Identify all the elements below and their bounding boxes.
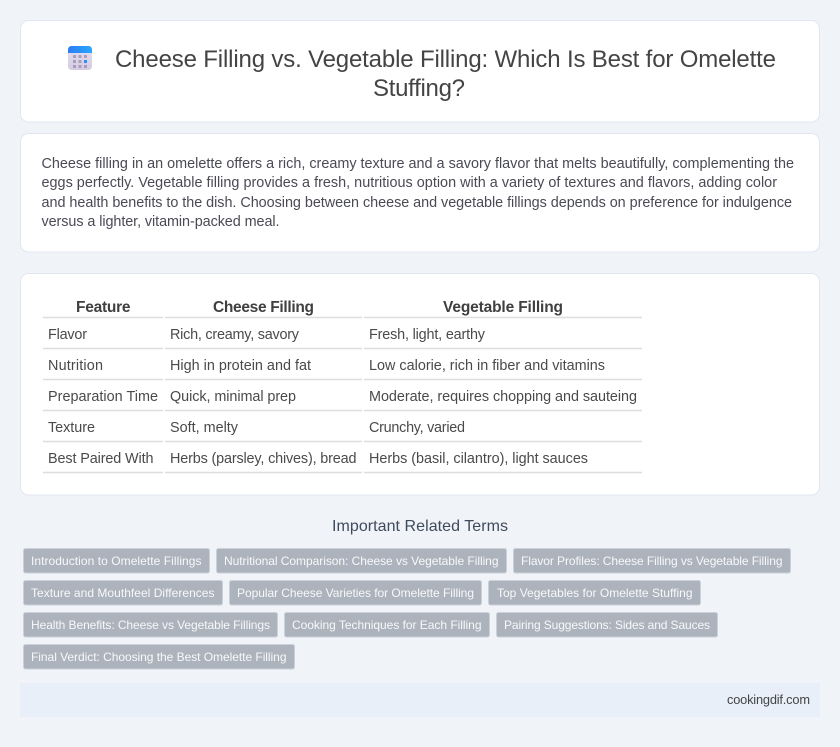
icon: calendar bbox=[68, 46, 92, 70]
title: Cheese Filling vs. Vegetable Filling: Which Is Best for Omelette bbox=[115, 46, 776, 73]
tag bbox=[24, 644, 294, 669]
table row: best paired with: Herbs (parsley, chives), bread bbox=[170, 451, 356, 467]
footer: cookingdif.com bbox=[727, 692, 810, 707]
table header row: Feature bbox=[76, 299, 131, 316]
tag bbox=[496, 612, 718, 637]
panel: summary text: Cheese filling in an omelette offers a rich, creamy texture and a savory flavor that melts beautifully, complementing the bbox=[42, 156, 794, 172]
table row: nutrition: Low calorie, rich in fiber and vitamins bbox=[369, 358, 605, 374]
table row: preparation time: Preparation Time bbox=[48, 389, 158, 405]
table row: flavor: Fresh, light, earthy bbox=[369, 327, 486, 343]
tag: Nutritional Comparison: Cheese vs Vegetable Filling bbox=[224, 554, 498, 568]
tag: Pairing Suggestions: Sides and Sauces bbox=[504, 618, 710, 632]
title bbox=[115, 46, 776, 102]
table row: preparation time: Quick, minimal prep bbox=[170, 389, 296, 405]
table row: texture bbox=[43, 420, 642, 442]
tag bbox=[24, 612, 278, 637]
related terms tags bbox=[24, 548, 790, 669]
panel: summary text: eggs perfectly. Vegetable filling provides a fresh, nutritious option with a variety of textures and flavors, adding color bbox=[42, 175, 777, 191]
table header row: Vegetable Filling bbox=[443, 299, 563, 316]
table row: best paired with bbox=[43, 451, 642, 472]
table row: best paired with: Herbs (basil, cilantro), light sauces bbox=[369, 451, 588, 467]
tag: Flavor Profiles: Cheese Filling vs Vegetable Filling bbox=[521, 554, 782, 568]
table row: texture: Crunchy, varied bbox=[369, 420, 465, 436]
panel: summary text: versus a lighter, vitamin-packed meal. bbox=[42, 214, 280, 230]
table row: flavor bbox=[43, 327, 642, 348]
tag: Popular Cheese Varieties for Omelette Filling bbox=[237, 586, 474, 600]
table row: preparation time bbox=[43, 389, 642, 410]
tag: Final Verdict: Choosing the Best Omelette Filling bbox=[31, 650, 286, 664]
table header row: Cheese Filling bbox=[213, 299, 314, 316]
table row: texture: Texture bbox=[48, 420, 95, 436]
panel: title card bbox=[20, 20, 820, 122]
tag: Top Vegetables for Omelette Stuffing bbox=[497, 586, 692, 600]
table row: flavor: Rich, creamy, savory bbox=[170, 327, 300, 343]
panel: summary text: and health benefits to the dish. Choosing between cheese and vegetable fillings depends on preference for indulgence bbox=[42, 195, 792, 211]
tag bbox=[216, 548, 506, 573]
table header row bbox=[43, 299, 642, 318]
table row: flavor: Flavor bbox=[48, 327, 87, 343]
tag bbox=[488, 580, 700, 605]
tag bbox=[24, 548, 210, 573]
table row: nutrition bbox=[43, 358, 642, 380]
table row: preparation time: Moderate, requires chopping and sauteing bbox=[369, 389, 637, 405]
table row: nutrition: High in protein and fat bbox=[170, 358, 311, 374]
table row: nutrition: Nutrition bbox=[48, 358, 103, 374]
tag: Texture and Mouthfeel Differences bbox=[31, 586, 214, 600]
tag bbox=[514, 548, 790, 573]
table row: best paired with: Best Paired With bbox=[48, 451, 154, 467]
table row: texture: Soft, melty bbox=[170, 420, 239, 436]
tag: Health Benefits: Cheese vs Vegetable Fillings bbox=[31, 618, 270, 632]
footer bbox=[20, 683, 820, 717]
tag bbox=[230, 580, 482, 605]
tag: Introduction to Omelette Fillings bbox=[31, 554, 202, 568]
tag bbox=[24, 580, 222, 605]
tag bbox=[284, 612, 490, 637]
heading: important related terms: Important Related Terms bbox=[332, 518, 508, 535]
panel: summary text bbox=[20, 134, 820, 252]
panel: comparison table bbox=[20, 274, 820, 495]
tag: Cooking Techniques for Each Filling bbox=[292, 618, 482, 632]
title: Stuffing? bbox=[373, 75, 465, 102]
